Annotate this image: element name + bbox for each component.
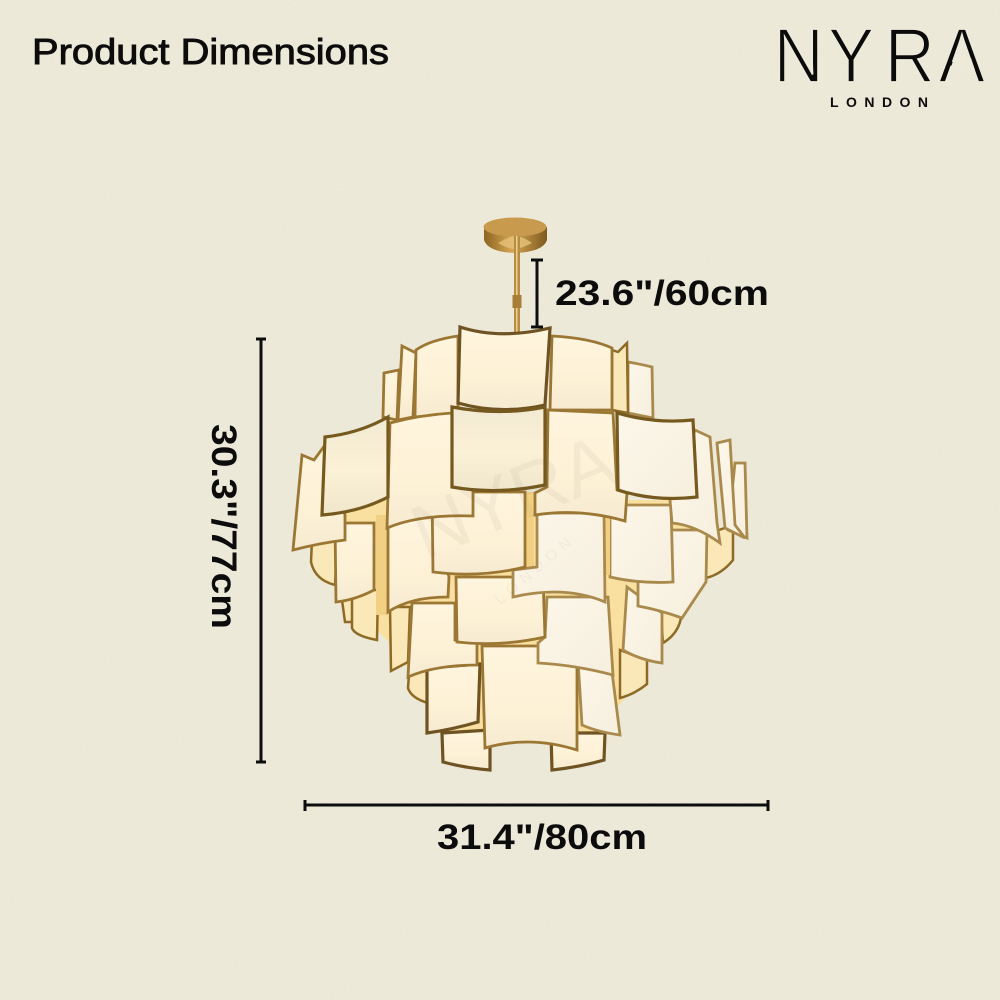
upper back panels <box>383 327 653 420</box>
logo: NYRA London: NYRA <box>774 13 985 99</box>
faint watermark: LONDON <box>492 531 579 608</box>
upper front panels <box>322 407 697 528</box>
dimension: height 30.3 inch: 30.3"/77cm <box>204 424 243 629</box>
chandelier <box>293 218 747 770</box>
middle tier panels <box>388 492 613 677</box>
warm glow behind panels <box>322 500 725 738</box>
dimension: drop 23.6 inch: 23.6"/60cm <box>555 274 769 313</box>
lower tier panels <box>335 505 707 750</box>
ceiling canopy and rod <box>484 218 547 334</box>
faint watermark: NYRA <box>400 418 627 576</box>
outer side panels <box>293 430 747 550</box>
bright gold gaps between panels <box>376 492 610 615</box>
dimension: width 31.4 inch: 31.4"/80cm <box>437 818 647 857</box>
dimension: width 31.4 inch <box>305 800 768 857</box>
lowest tier panels <box>311 525 733 770</box>
dimension: drop 23.6 inch <box>531 260 769 327</box>
title: Product Dimensions <box>32 31 389 72</box>
dimension: height 30.3 inch <box>204 339 266 762</box>
logo: NYRA London: LONDON <box>830 94 928 110</box>
